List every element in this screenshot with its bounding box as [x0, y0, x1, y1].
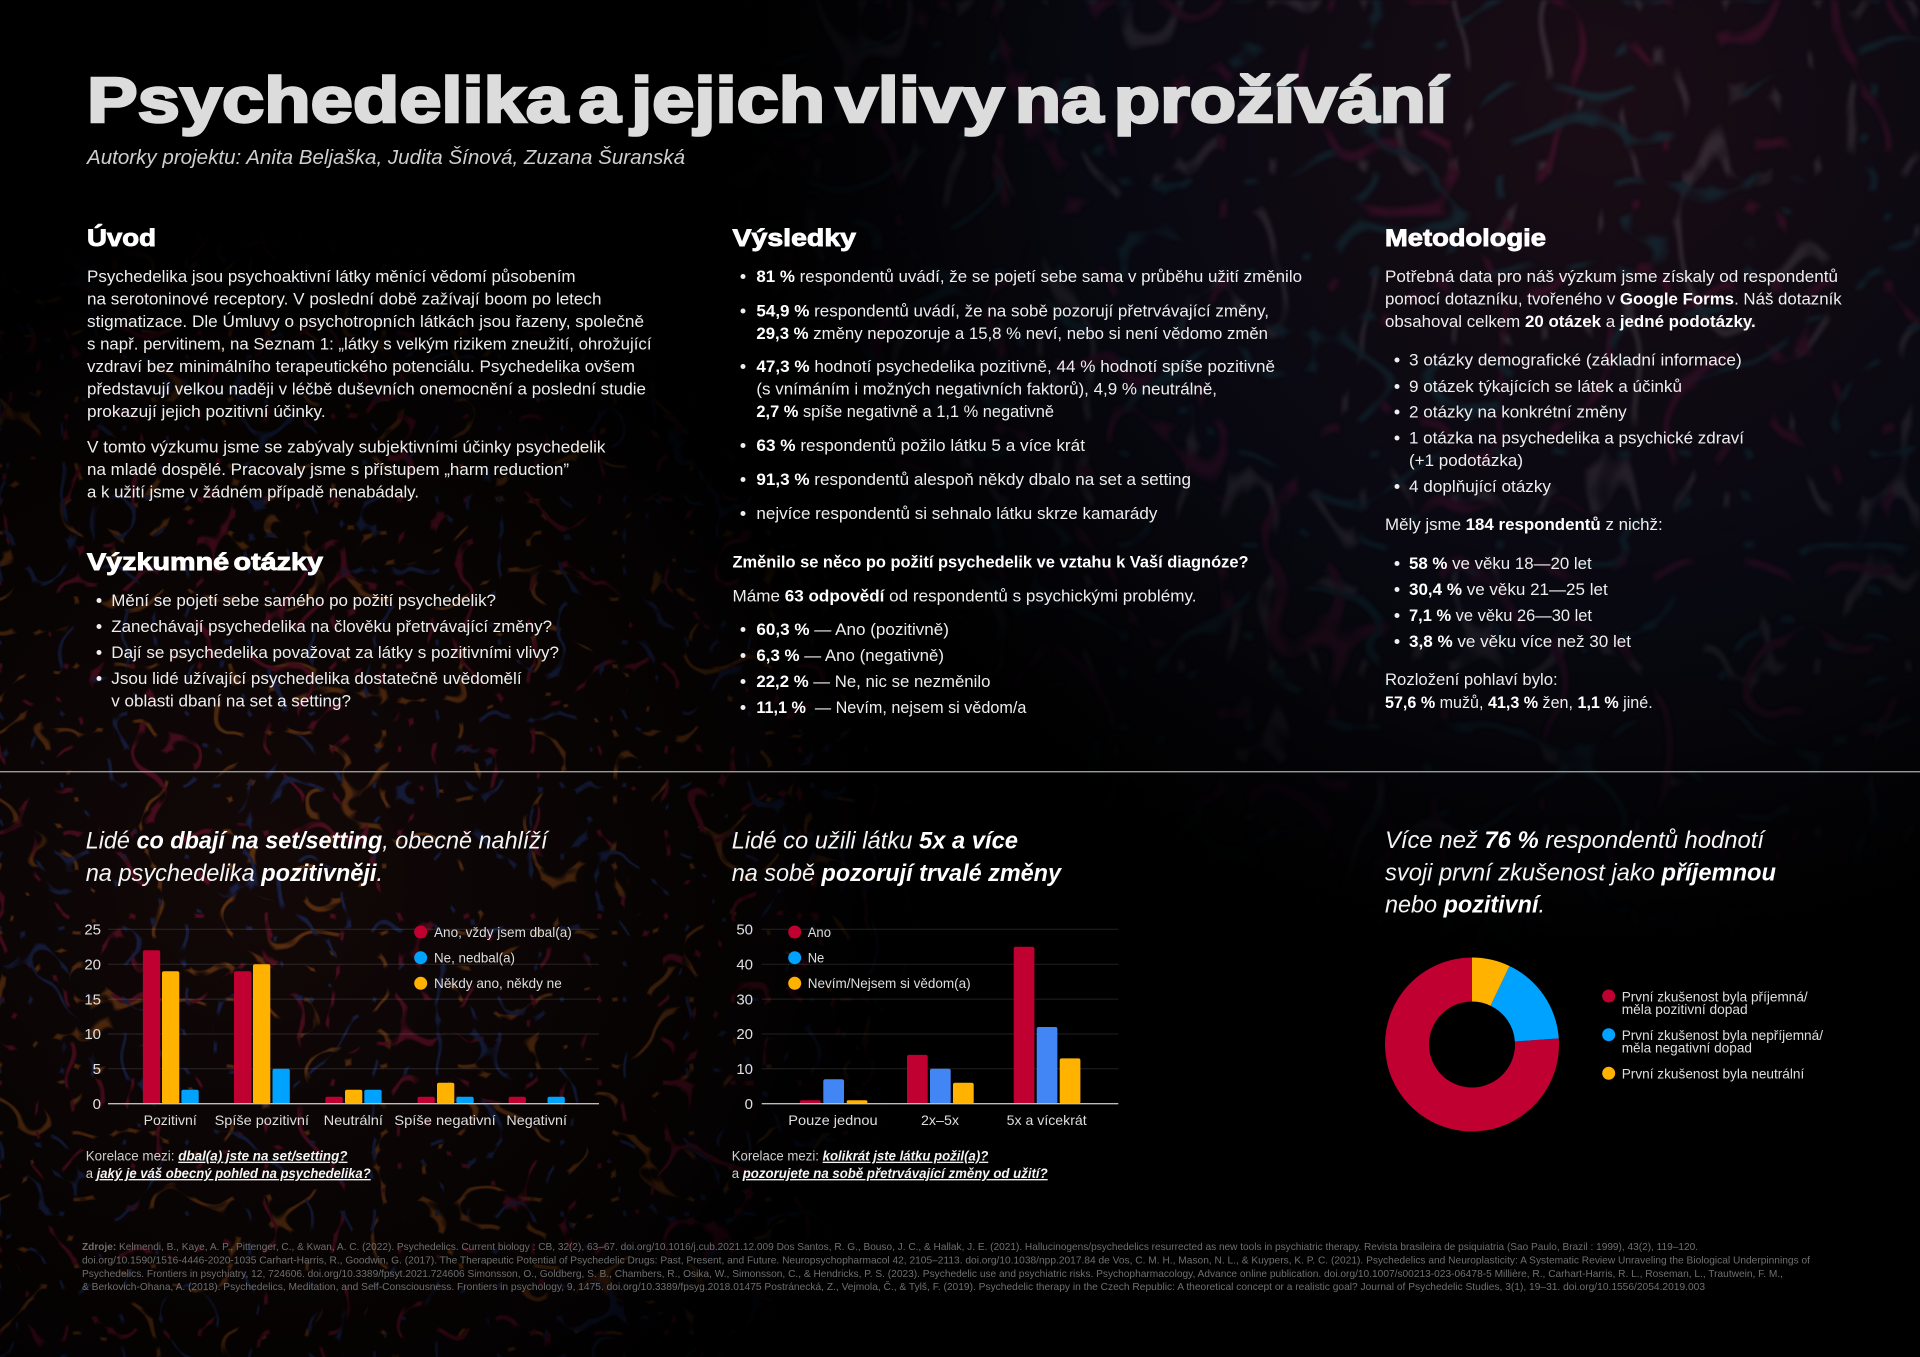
subtitle: authors: Autorky projektu: Anita Beljaška, Judita Šínová, Zuzana Šuranská	[86, 146, 685, 169]
list: diagnosis answers	[740, 620, 1027, 717]
list: questionnaire structure: (+1 podotázka)	[1409, 451, 1523, 470]
text block: method intro	[1385, 267, 1842, 331]
bar chart: 5x a více: 5x a vícekrát	[1007, 1112, 1087, 1128]
bar chart: set/setting: Spíše negativní	[394, 1112, 496, 1128]
legend: set/setting	[414, 924, 572, 991]
list: research questions: Jsou lidé užívající psychedelika dostatečně uvědomělí	[111, 669, 522, 688]
panel: výsledky	[732, 225, 1302, 717]
note: correlation set/setting: a jaký je váš obecný pohled na psychedelika?	[86, 1166, 371, 1181]
list: research questions: v oblasti dbaní na set a setting?	[111, 692, 351, 710]
list: diagnosis answers: 22,2 % — Ne, nic se nezměnilo	[756, 672, 990, 691]
list: results: nejvíce respondentů si sehnalo látku skrze kamarády	[756, 504, 1158, 523]
text block: method intro: Potřebná data pro náš výzkum jsme získaly od respondentů	[1385, 267, 1838, 286]
bar chart: 5x a více: 0	[745, 1096, 753, 1113]
sources: Psychedelics. Frontiers in psychiatry, 12, 724606. doi.org/10.3389/fpsyt.2021.724606 Simonsson, O., Goldberg, S. B., Chambers, R., Osika, W., Simonsson, C., & Hendricks, P. S. (2023). Psychedelic use and psychiatric risks. Psychopharmacology, Advance online publication. doi.org/10.1007/s00213-023-06478-5 Millière, R., Carhart-Harris, R. L., Roseman, L., Trautwein, F. M.,	[82, 1268, 1783, 1280]
bar chart: 5x a více: 20	[736, 1026, 753, 1043]
bar chart: set/setting: 25	[84, 922, 101, 938]
text block: úvod paragraphs: představují velkou naději v léčbě duševních onemocnění a poslední studie	[87, 380, 646, 398]
list: diagnosis answers: 60,3 % — Ano (pozitivně)	[756, 620, 949, 639]
heading: chart set/setting	[86, 828, 550, 887]
text block: úvod paragraphs: s např. pervitinem, na Seznam 1: „látky s velkým rizikem zneužití, ohrožující	[87, 334, 652, 354]
text block: úvod paragraphs	[87, 267, 652, 502]
text: answers count: Máme 63 odpovědí od respondentů s psychickými problémy.	[732, 587, 1196, 606]
bar chart: set/setting: 10	[84, 1026, 101, 1043]
text block: úvod paragraphs: na serotoninové receptory. V poslední době zažívají boom po letech	[87, 290, 602, 308]
sources	[82, 1241, 1810, 1293]
bar chart: 5x a více: Pouze jednou	[788, 1112, 878, 1128]
bar chart: set/setting: 15	[84, 991, 101, 1008]
list: questionnaire structure	[1394, 351, 1744, 496]
list: questionnaire structure: 3 otázky demografické (základní informace)	[1409, 351, 1742, 370]
text block: method intro: obsahoval celkem 20 otázek a jedné podotázky.	[1385, 312, 1756, 331]
legend: set/setting: Ne, nedbal(a)	[434, 950, 515, 966]
list: results: 54,9 % respondentů uvádí, že na sobě pozorují přetrvávající změny,	[756, 302, 1269, 321]
list: age groups: 7,1 % ve věku 26—30 let	[1409, 606, 1592, 625]
list: age groups	[1394, 554, 1631, 651]
text block: úvod paragraphs: Psychedelika jsou psychoaktivní látky měnící vědomí působením	[87, 267, 576, 286]
legend: první zkušenost: měla negativní dopad	[1622, 1040, 1752, 1056]
bar chart: 5x a více	[736, 922, 1118, 1128]
heading: chart první zkušenost	[1385, 827, 1776, 919]
note: correlation 5x a více	[732, 1149, 1048, 1181]
note: correlation 5x a více: Korelace mezi: kolikrát jste látku požil(a)?	[732, 1149, 988, 1164]
list: research questions: Zanechávají psychedelika na člověku přetrvávající změny?	[111, 617, 552, 636]
list: age groups: 58 % ve věku 18—20 let	[1409, 554, 1592, 573]
title: Psychedelika a jejich vlivy na prožívání	[87, 64, 1450, 136]
note: correlation 5x a více: a pozorujete na sobě přetrvávající změny od užití?	[732, 1166, 1048, 1181]
legend: 5x a více: Nevím/Nejsem si vědom(a)	[808, 975, 971, 991]
heading: výzkumné otázky: Výzkumné otázky	[87, 549, 324, 576]
bar chart: 5x a více: 10	[736, 1061, 753, 1078]
list: research questions: Mění se pojetí sebe samého po požití psychedelik?	[111, 591, 496, 610]
list: results: 91,3 % respondentů alespoň někdy dbalo na set a setting	[756, 470, 1191, 489]
legend: první zkušenost: První zkušenost byla neutrální	[1622, 1066, 1804, 1082]
legend: první zkušenost	[1602, 988, 1823, 1082]
heading: chart 5x a více: Lidé co užili látku 5x a více	[732, 828, 1018, 855]
list: results: 29,3 % změny nepozoruje a 15,8 % neví, nebo si není vědomo změn	[756, 324, 1268, 343]
bar chart: 5x a více: 2x–5x	[921, 1112, 959, 1128]
list: results: 63 % respondentů požilo látku 5 a více krát	[756, 436, 1085, 455]
heading: chart první zkušenost: svoji první zkušenost jako příjemnou	[1385, 860, 1776, 886]
legend: 5x a více	[788, 924, 971, 991]
text block: úvod paragraphs: stigmatizace. Dle Úmluvy o psychotropních látkách jsou řazeny, společně	[87, 312, 644, 331]
legend: set/setting: Někdy ano, někdy ne	[434, 975, 562, 991]
heading: chart set/setting: Lidé co dbají na set/setting, obecně nahlíží	[86, 828, 550, 855]
list: research questions	[96, 591, 559, 710]
text block: úvod paragraphs: V tomto výzkumu jsme se zabývaly subjektivními účinky psychedelik	[87, 438, 606, 457]
text: gender split: 57,6 % mužů, 41,3 % žen, 1,1 % jiné.	[1385, 693, 1653, 712]
bar chart: set/setting: Spíše pozitivní	[215, 1112, 309, 1128]
bar chart: set/setting: Neutrální	[324, 1112, 383, 1128]
list: age groups: 30,4 % ve věku 21—25 let	[1409, 580, 1608, 599]
heading: metodologie: Metodologie	[1385, 225, 1546, 252]
legend: první zkušenost: První zkušenost byla příjemná/	[1622, 988, 1808, 1004]
heading: úvod: Úvod	[87, 224, 156, 252]
text block: úvod paragraphs: vzdraví bez minimálního terapeutického potenciálu. Psychedelika ovšem	[87, 357, 635, 376]
bar chart: set/setting: 5	[93, 1061, 101, 1078]
text: gender split: Rozložení pohlaví bylo:	[1385, 670, 1558, 689]
bar chart: set/setting: Pozitivní	[144, 1112, 197, 1128]
panel: chart set/setting	[84, 828, 599, 1181]
list: diagnosis answers: 11,1 % — Nevím, nejsem si vědom/a	[756, 698, 1027, 717]
panel: úvod	[87, 224, 652, 502]
panel: výzkumné otázky	[87, 549, 559, 710]
list: results: 2,7 % spíše negativně a 1,1 % negativně	[756, 402, 1054, 421]
panel: chart 5x a více	[732, 828, 1118, 1181]
heading: výsledky: Výsledky	[732, 225, 857, 252]
heading: chart 5x a více: na sobě pozorují trvalé změny	[732, 860, 1063, 887]
text block: method intro: pomocí dotazníku, tvořeného v Google Forms. Náš dotazník	[1385, 290, 1842, 308]
list: results	[740, 267, 1302, 523]
legend: první zkušenost: První zkušenost byla nepříjemná/	[1622, 1027, 1823, 1043]
legend: první zkušenost: měla pozitivní dopad	[1622, 1001, 1748, 1017]
text block: úvod paragraphs: na mladé dospělé. Pracovaly jsme s přístupem „harm reduction”	[87, 460, 569, 479]
panel: chart první zkušenost	[1385, 827, 1823, 1132]
heading: chart set/setting: na psychedelika pozitivněji.	[86, 860, 383, 887]
note: correlation set/setting: Korelace mezi: dbal(a) jste na set/setting?	[86, 1149, 347, 1164]
list: research questions: Dají se psychedelika považovat za látky s pozitivními vlivy?	[111, 643, 559, 662]
bar chart: set/setting: 0	[93, 1096, 101, 1113]
text: gender split	[1385, 670, 1653, 712]
sources: Zdroje: Kelmendi, B., Kaye, A. P., Pittenger, C., & Kwan, A. C. (2022). Psychedelics. Current biology : CB, 32(2), 63–67. doi.org/10.1016/j.cub.2021.12.009 Dos Santos, R. G., Bouso, J. C., & Hallak, J. E. (2021). Hallucinogens/psychedelics resurrected as new tools in psychiatric therapy. Revista brasileira de psiquiatria (Sao Paulo, Brazil : 1999), 43(2), 119–120.	[82, 1241, 1698, 1253]
list: questionnaire structure: 1 otázka na psychedelika a psychické zdraví	[1409, 428, 1744, 448]
sources: & Berkovich-Ohana, A. (2018). Psychedelics, Meditation, and Self-Consciousness. Frontiers in psychology, 9, 1475. doi.org/10.3389/fpsyg.2018.01475 Postránecká, Z., Vejmola, Č., & Tylš, F. (2019). Psychedelic therapy in the Czech Republic: A theoretical concept or a realistic goal? Journal of Psychedelic Studies, 3(1), 19–31. doi.org/10.1556/2054.2019.003	[82, 1280, 1705, 1293]
bar chart: 5x a více: 40	[736, 956, 753, 973]
sources: doi.org/10.1590/1516-4446-2020-1035 Carhart-Harris, R., Goodwin, G. (2017). The Therapeutic Potential of Psychedelic Drugs: Past, Present, and Future. Neuropsychopharmacol 42, 2105–2113. doi.org/10.1038/npp.2017.84 de Vos, C. M. H., Mason, N. L., & Kuypers, K. P. C. (2021). Psychedelics and Neuroplasticity: A Systematic Review Unraveling the Biological Underpinnings of	[82, 1254, 1810, 1266]
list: questionnaire structure: 4 doplňující otázky	[1409, 477, 1551, 496]
list: age groups: 3,8 % ve věku více než 30 let	[1409, 632, 1631, 651]
heading: chart první zkušenost: Více než 76 % respondentů hodnotí	[1385, 827, 1766, 854]
list: results: 47,3 % hodnotí psychedelika pozitivně, 44 % hodnotí spíše pozitivně	[756, 357, 1275, 376]
list: diagnosis answers: 6,3 % — Ano (negativně)	[756, 646, 944, 665]
bar chart: 5x a více: 50	[736, 922, 753, 938]
legend: 5x a více: Ne	[808, 950, 824, 966]
donut chart: první zkušenost	[1385, 958, 1559, 1132]
panel: metodologie	[1385, 225, 1842, 712]
list: questionnaire structure: 9 otázek týkajících se látek a účinků	[1409, 377, 1682, 396]
question: diagnosis: Změnilo se něco po požití psychedelik ve vztahu k Vaší diagnóze?	[732, 553, 1248, 572]
text block: úvod paragraphs: a k užití jsme v žádném případě nenabádaly.	[87, 482, 419, 502]
text: respondents: Měly jsme 184 respondentů z nichž:	[1385, 515, 1663, 534]
bar chart: set/setting	[84, 922, 599, 1128]
bar chart: 5x a více: 30	[736, 991, 753, 1008]
heading: chart 5x a více	[732, 828, 1063, 887]
list: questionnaire structure: 2 otázky na konkrétní změny	[1409, 402, 1627, 422]
legend: set/setting: Ano, vždy jsem dbal(a)	[434, 924, 572, 940]
list: results: (s vnímáním i možných negativních faktorů), 4,9 % neutrálně,	[756, 380, 1217, 398]
bar chart: set/setting: Negativní	[506, 1112, 567, 1128]
text block: úvod paragraphs: prokazují jejich pozitivní účinky.	[87, 402, 326, 421]
list: results: 81 % respondentů uvádí, že se pojetí sebe sama v průběhu užití změnilo	[756, 267, 1302, 286]
heading: chart první zkušenost: nebo pozitivní.	[1385, 892, 1545, 919]
bar chart: set/setting: 20	[84, 956, 101, 973]
legend: 5x a více: Ano	[808, 924, 831, 940]
note: correlation set/setting	[86, 1149, 371, 1181]
